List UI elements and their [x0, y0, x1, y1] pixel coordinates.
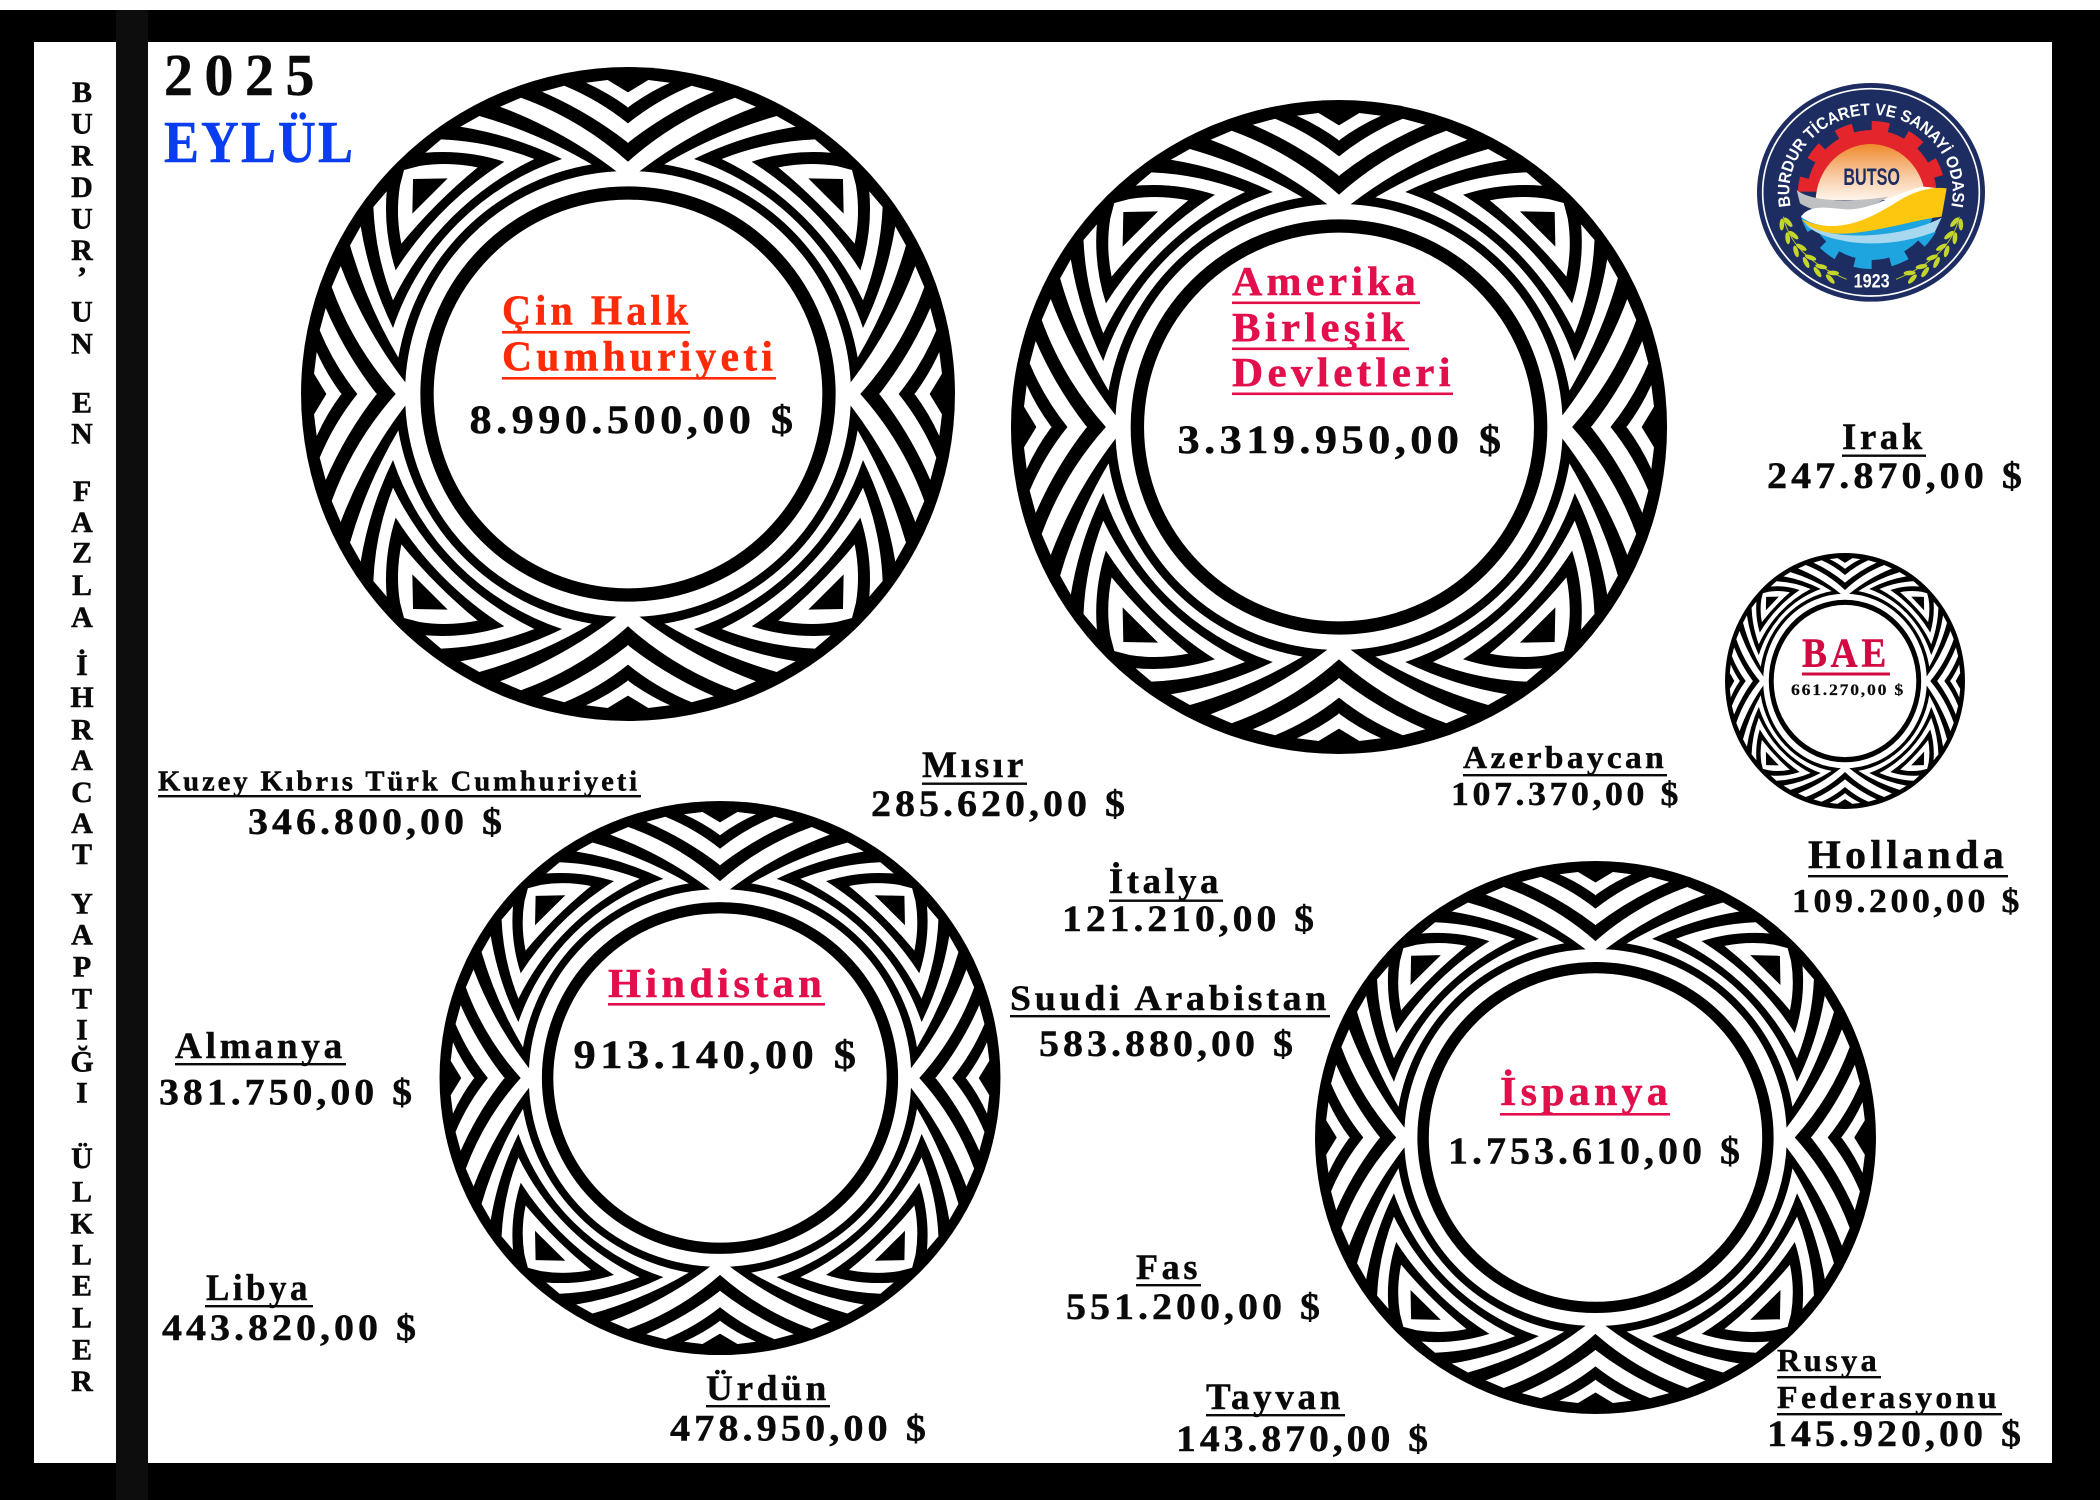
vertical sidebar title: U: [71, 108, 93, 140]
logo: BUTSO emblem: BURDUR TİCARET VE SANAYİ ODASI: [1778, 103, 1964, 208]
vertical sidebar title: P: [73, 950, 91, 984]
label: Suudi Arabistan: [1010, 978, 1330, 1065]
vertical sidebar title: I: [76, 1013, 88, 1046]
label: Rusya Federasyonu: 145.920,00 $: [1767, 1414, 2025, 1455]
vertical sidebar title: E: [72, 1270, 92, 1302]
vertical sidebar title: L: [72, 1176, 92, 1208]
ring: İspanya: 1.753.610,00 $: [1448, 1130, 1744, 1172]
label: Libya: Libya: [206, 1268, 311, 1309]
vertical sidebar title: Ü: [71, 1142, 93, 1175]
label: Almanya: [159, 1026, 416, 1114]
ring: İspanya: İspanya: [1500, 1068, 1672, 1114]
label: Suudi Arabistan: Suudi Arabistan: [1010, 978, 1330, 1018]
vertical sidebar title: ’: [77, 261, 87, 294]
ring: Çin Halk Cumhuriyeti: 8.990.500,00 $: [470, 397, 798, 442]
label: Mısır: 285.620,00 $: [871, 784, 1129, 825]
ring: Hindistan: [440, 801, 1000, 1355]
label: Ürdün: [670, 1368, 930, 1450]
vertical sidebar title: N: [71, 328, 93, 361]
vertical sidebar title: I: [76, 1076, 88, 1109]
label: Fas: Fas: [1136, 1247, 1201, 1287]
vertical sidebar title: R: [71, 713, 93, 746]
heading: year and month: EYLÜL: [164, 109, 355, 175]
vertical sidebar title: Y: [71, 888, 93, 920]
heading: year and month: [164, 42, 355, 175]
label: Irak: [1767, 417, 2026, 497]
ring: Çin Halk Cumhuriyeti: Cumhuriyeti: [502, 334, 777, 380]
vertical sidebar title: İ: [76, 649, 88, 682]
label: Libya: 443.820,00 $: [162, 1308, 420, 1349]
label: Azerbaycan: 107.370,00 $: [1451, 776, 1682, 813]
label: Rusya Federasyonu: Federasyonu: [1777, 1379, 2000, 1415]
label: Azerbaycan: [1451, 739, 1682, 813]
label: Kuzey Kıbrıs Türk Cumhuriyeti: Kuzey Kıbrıs Türk Cumhuriyeti: [158, 766, 640, 798]
vertical sidebar title: D: [71, 171, 93, 204]
label: Mısır: Mısır: [922, 745, 1027, 786]
ring: Çin Halk Cumhuriyeti: [301, 67, 955, 721]
ring: Hindistan: Hindistan: [608, 960, 826, 1006]
vertical sidebar title: A: [71, 744, 93, 777]
label: İtalya: 121.210,00 $: [1062, 899, 1318, 940]
label: Almanya: Almanya: [175, 1026, 346, 1067]
ring: Amerika Birleşik Devletleri: Devletleri: [1232, 349, 1455, 395]
label: Rusya Federasyonu: [1767, 1342, 2025, 1455]
vertical sidebar title: E: [72, 387, 92, 420]
label: Mısır: [871, 745, 1129, 825]
label: Hollanda: 109.200,00 $: [1792, 883, 2023, 920]
label: Hollanda: [1792, 832, 2023, 920]
label: Kuzey Kıbrıs Türk Cumhuriyeti: [158, 766, 641, 843]
vertical sidebar title: N: [71, 417, 93, 450]
vertical sidebar title: L: [72, 1302, 92, 1334]
vertical sidebar title: F: [73, 475, 91, 508]
vertical sidebar title: C: [71, 776, 93, 809]
vertical sidebar title: L: [72, 569, 92, 602]
label: Hollanda: Hollanda: [1808, 832, 2008, 877]
label: Azerbaycan: Azerbaycan: [1463, 739, 1667, 775]
logo: BUTSO emblem: 1923: [1854, 271, 1890, 292]
label: Libya: [162, 1268, 420, 1349]
ring: BAE: [1725, 553, 1965, 809]
ring: Amerika Birleşik Devletleri: Amerika: [1232, 258, 1420, 304]
label: Tayvan: Tayvan: [1206, 1377, 1344, 1418]
vertical sidebar title: R: [71, 234, 93, 267]
heading: year and month: 2025: [164, 42, 326, 108]
vertical sidebar title: U: [71, 296, 93, 329]
label: Almanya: 381.750,00 $: [159, 1072, 416, 1114]
vertical sidebar title: A: [71, 601, 93, 634]
vertical sidebar title: T: [72, 838, 92, 871]
vertical sidebar title: Ğ: [70, 1046, 94, 1079]
ring: BAE: BAE: [1802, 630, 1890, 676]
ring: Amerika Birleşik Devletleri: [1011, 100, 1667, 754]
label: Irak: 247.870,00 $: [1767, 456, 2026, 497]
ring: Amerika Birleşik Devletleri: 3.319.950,00 $: [1178, 417, 1506, 462]
vertical sidebar title: T: [72, 983, 92, 1016]
vertical sidebar title: Z: [72, 537, 92, 570]
vertical sidebar title: L: [72, 1238, 92, 1272]
label: Tayvan: 143.870,00 $: [1176, 1419, 1432, 1460]
vertical sidebar title: A: [71, 506, 93, 539]
logo: BUTSO emblem: BUTSO: [1843, 164, 1900, 191]
ring: İspanya: [1315, 861, 1876, 1414]
ring: Hindistan: 913.140,00 $: [574, 1032, 860, 1077]
label: Ürdün: 478.950,00 $: [670, 1408, 930, 1450]
label: Fas: [1066, 1247, 1324, 1328]
label: Kuzey Kıbrıs Türk Cumhuriyeti: 346.800,00 $: [248, 802, 506, 843]
vertical sidebar title: E: [72, 1334, 92, 1366]
logo: BUTSO emblem: [1757, 83, 1985, 302]
label: İtalya: İtalya: [1109, 861, 1222, 901]
label: Irak: Irak: [1842, 417, 1926, 458]
ring: Amerika Birleşik Devletleri: Birleşik: [1232, 304, 1409, 350]
vertical sidebar title: A: [71, 918, 93, 952]
vertical sidebar title: U: [71, 202, 93, 236]
vertical sidebar title: A: [71, 807, 93, 840]
vertical sidebar title: B: [72, 76, 92, 109]
vertical sidebar title: R: [71, 1365, 93, 1398]
label: Suudi Arabistan: 583.880,00 $: [1039, 1024, 1297, 1065]
label: İtalya: [1062, 861, 1318, 940]
label: Rusya Federasyonu: Rusya: [1777, 1342, 1880, 1378]
vertical sidebar title: K: [70, 1208, 94, 1241]
label: Tayvan: [1176, 1377, 1432, 1460]
ring: BAE: 661.270,00 $: [1791, 682, 1905, 699]
ring: Çin Halk Cumhuriyeti: Çin Halk: [502, 288, 692, 334]
vertical sidebar title: R: [71, 140, 93, 172]
label: Ürdün: Ürdün: [706, 1368, 830, 1408]
label: Fas: 551.200,00 $: [1066, 1287, 1324, 1328]
vertical sidebar title: H: [70, 681, 94, 714]
